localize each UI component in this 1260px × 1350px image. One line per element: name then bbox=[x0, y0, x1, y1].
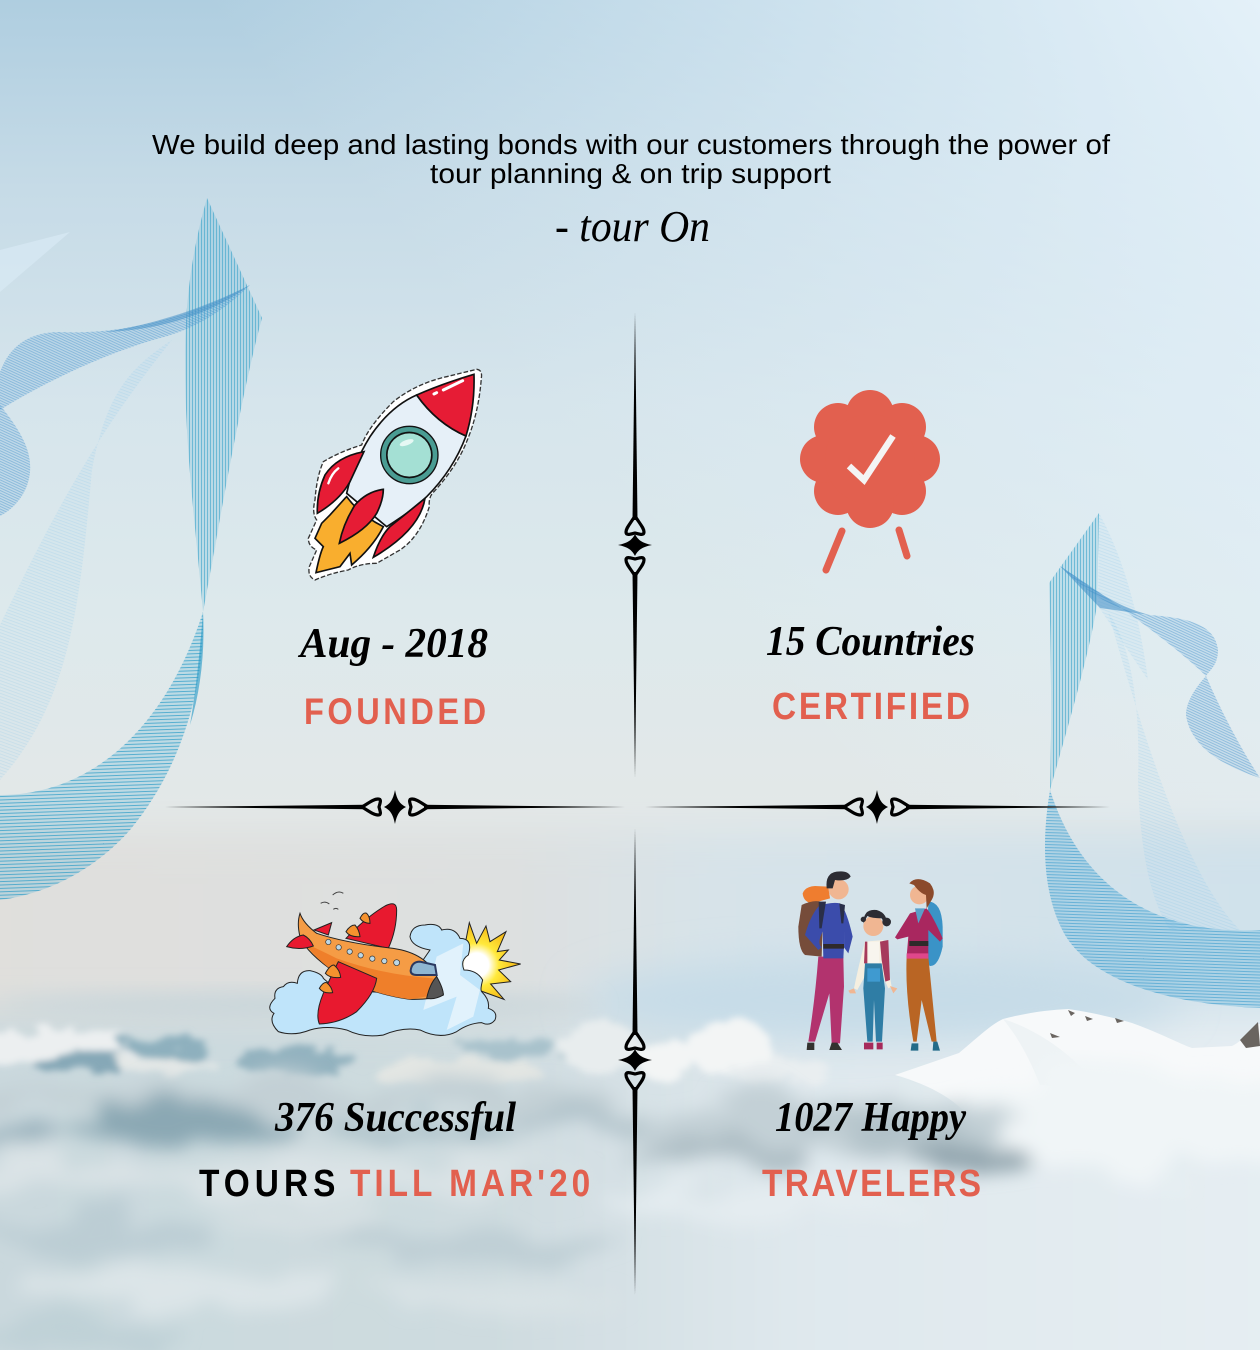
stat: certified: 15 Countries bbox=[766, 619, 975, 665]
quote heading: tour planning & on trip support bbox=[430, 158, 831, 189]
icon: rocket sticker bbox=[308, 369, 482, 580]
stat: successful tours bbox=[199, 1095, 590, 1204]
stat: happy travelers bbox=[762, 1095, 981, 1204]
decorative ribbon: left bbox=[0, 198, 262, 900]
icon: certified badge bbox=[800, 390, 940, 570]
quote heading bbox=[152, 129, 1110, 189]
stat: founded: Aug - 2018 bbox=[297, 621, 488, 667]
stat: certified: CERTIFIED bbox=[772, 685, 970, 727]
stat: certified bbox=[766, 619, 975, 727]
stat: founded: FOUNDED bbox=[304, 691, 486, 732]
divider: right horizontal bbox=[645, 790, 1110, 824]
decorative ribbon: right bbox=[1045, 513, 1260, 1008]
woman traveler bbox=[895, 879, 943, 1051]
divider: left horizontal bbox=[165, 790, 625, 824]
stat: happy travelers: TRAVELERS bbox=[762, 1162, 981, 1204]
quote heading: We build deep and lasting bonds with our customers through the power of bbox=[152, 129, 1110, 160]
icon: airplane with cloud and sun bbox=[270, 892, 521, 1036]
icon: three travelers bbox=[798, 871, 943, 1051]
divider: bottom vertical bbox=[618, 828, 652, 1295]
quote attribution: - tour On bbox=[555, 202, 710, 251]
stat: successful tours: TILL MAR'20 bbox=[350, 1162, 590, 1204]
snowy mountain bbox=[895, 1009, 1260, 1130]
stat: successful tours: 376 Successful bbox=[274, 1095, 516, 1141]
stat: successful tours: TOURS bbox=[199, 1162, 335, 1204]
stat: happy travelers: 1027 Happy bbox=[775, 1095, 966, 1141]
stat: founded bbox=[297, 621, 488, 732]
child traveler bbox=[848, 910, 897, 1049]
divider: top vertical bbox=[618, 312, 652, 778]
man traveler bbox=[798, 871, 853, 1050]
